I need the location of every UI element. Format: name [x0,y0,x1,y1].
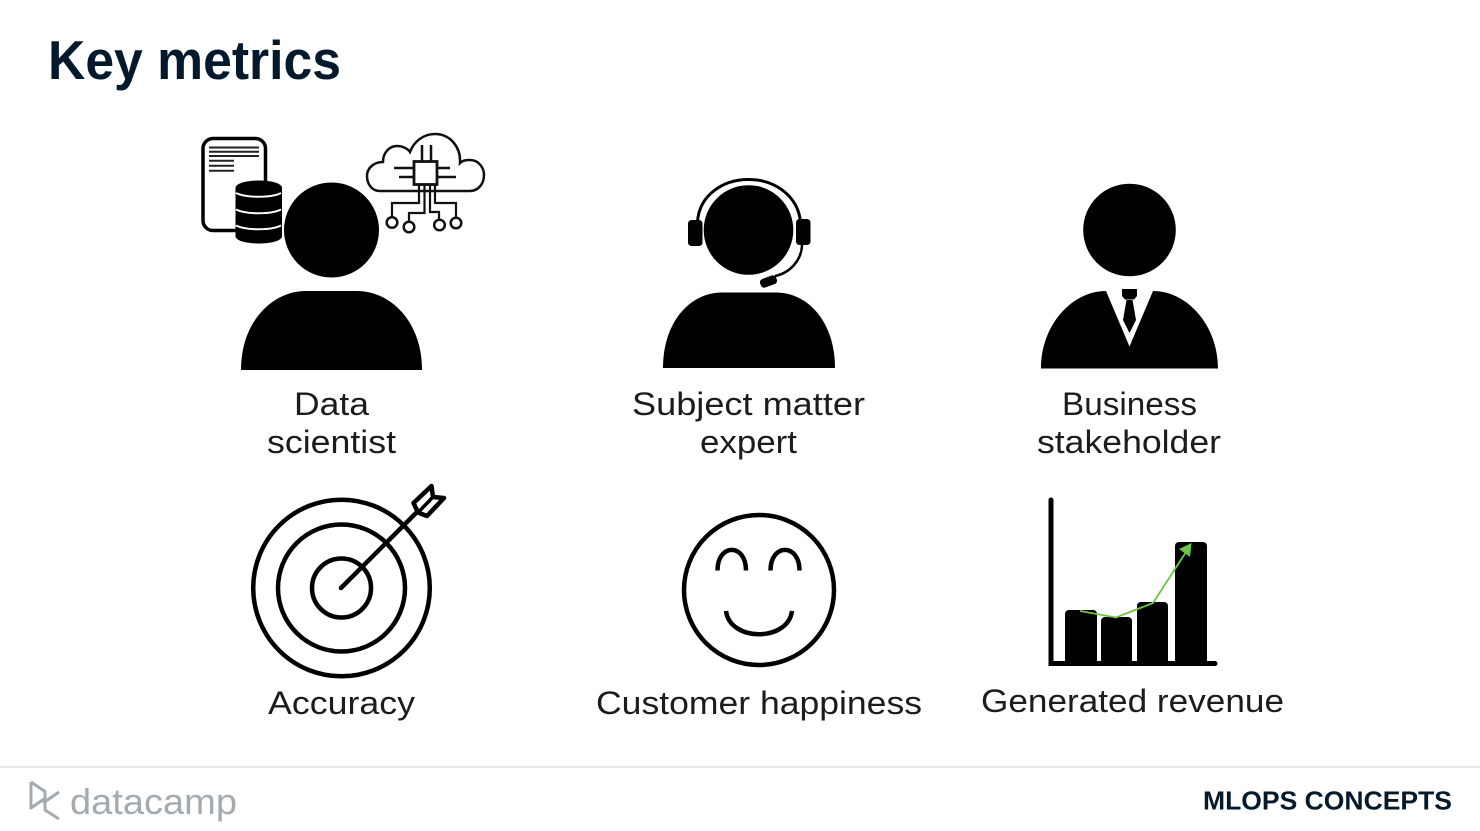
panel: data scientist [203,134,484,460]
icon: person body [241,291,422,370]
icon: cloud chip [367,134,484,232]
logo: datacamp: datacamp [70,781,237,822]
label: data scientist [267,386,396,460]
icon: person head [1083,184,1176,276]
label: subject matter expert [632,386,865,460]
label: data scientist: Data [294,386,369,422]
footer label: MLOPS CONCEPTS [1203,786,1452,816]
label: accuracy: Accuracy [268,685,415,721]
label: business stakeholder: stakeholder [1037,424,1221,460]
icon: headset head [688,180,810,289]
panel: accuracy [253,486,444,721]
icon: person body [663,292,835,368]
icon: document [203,138,266,230]
label: customer happiness: Customer happiness [596,685,922,721]
label: subject matter expert: expert [700,424,797,460]
icon: person head [284,182,379,278]
panel: customer happiness [596,515,922,721]
label: business stakeholder: Business [1062,386,1197,422]
panel: subject matter expert [632,180,865,460]
icon: database [236,180,282,244]
icon: suit body [1041,291,1218,368]
icon: smiley [684,515,834,665]
label: data scientist: scientist [267,424,396,460]
title: Key metrics [48,29,341,91]
label: business stakeholder [1037,386,1221,460]
icon: target [253,486,444,676]
chart: bar chart with growth arrow [1051,500,1215,664]
panel: generated revenue [981,500,1284,719]
footer divider [0,766,1480,768]
icon: tie [1122,289,1137,333]
label: generated revenue: Generated revenue [981,683,1284,719]
label: subject matter expert: Subject matter [632,386,865,422]
panel: business stakeholder [1037,184,1221,460]
arrow: growth trend [1080,543,1192,618]
